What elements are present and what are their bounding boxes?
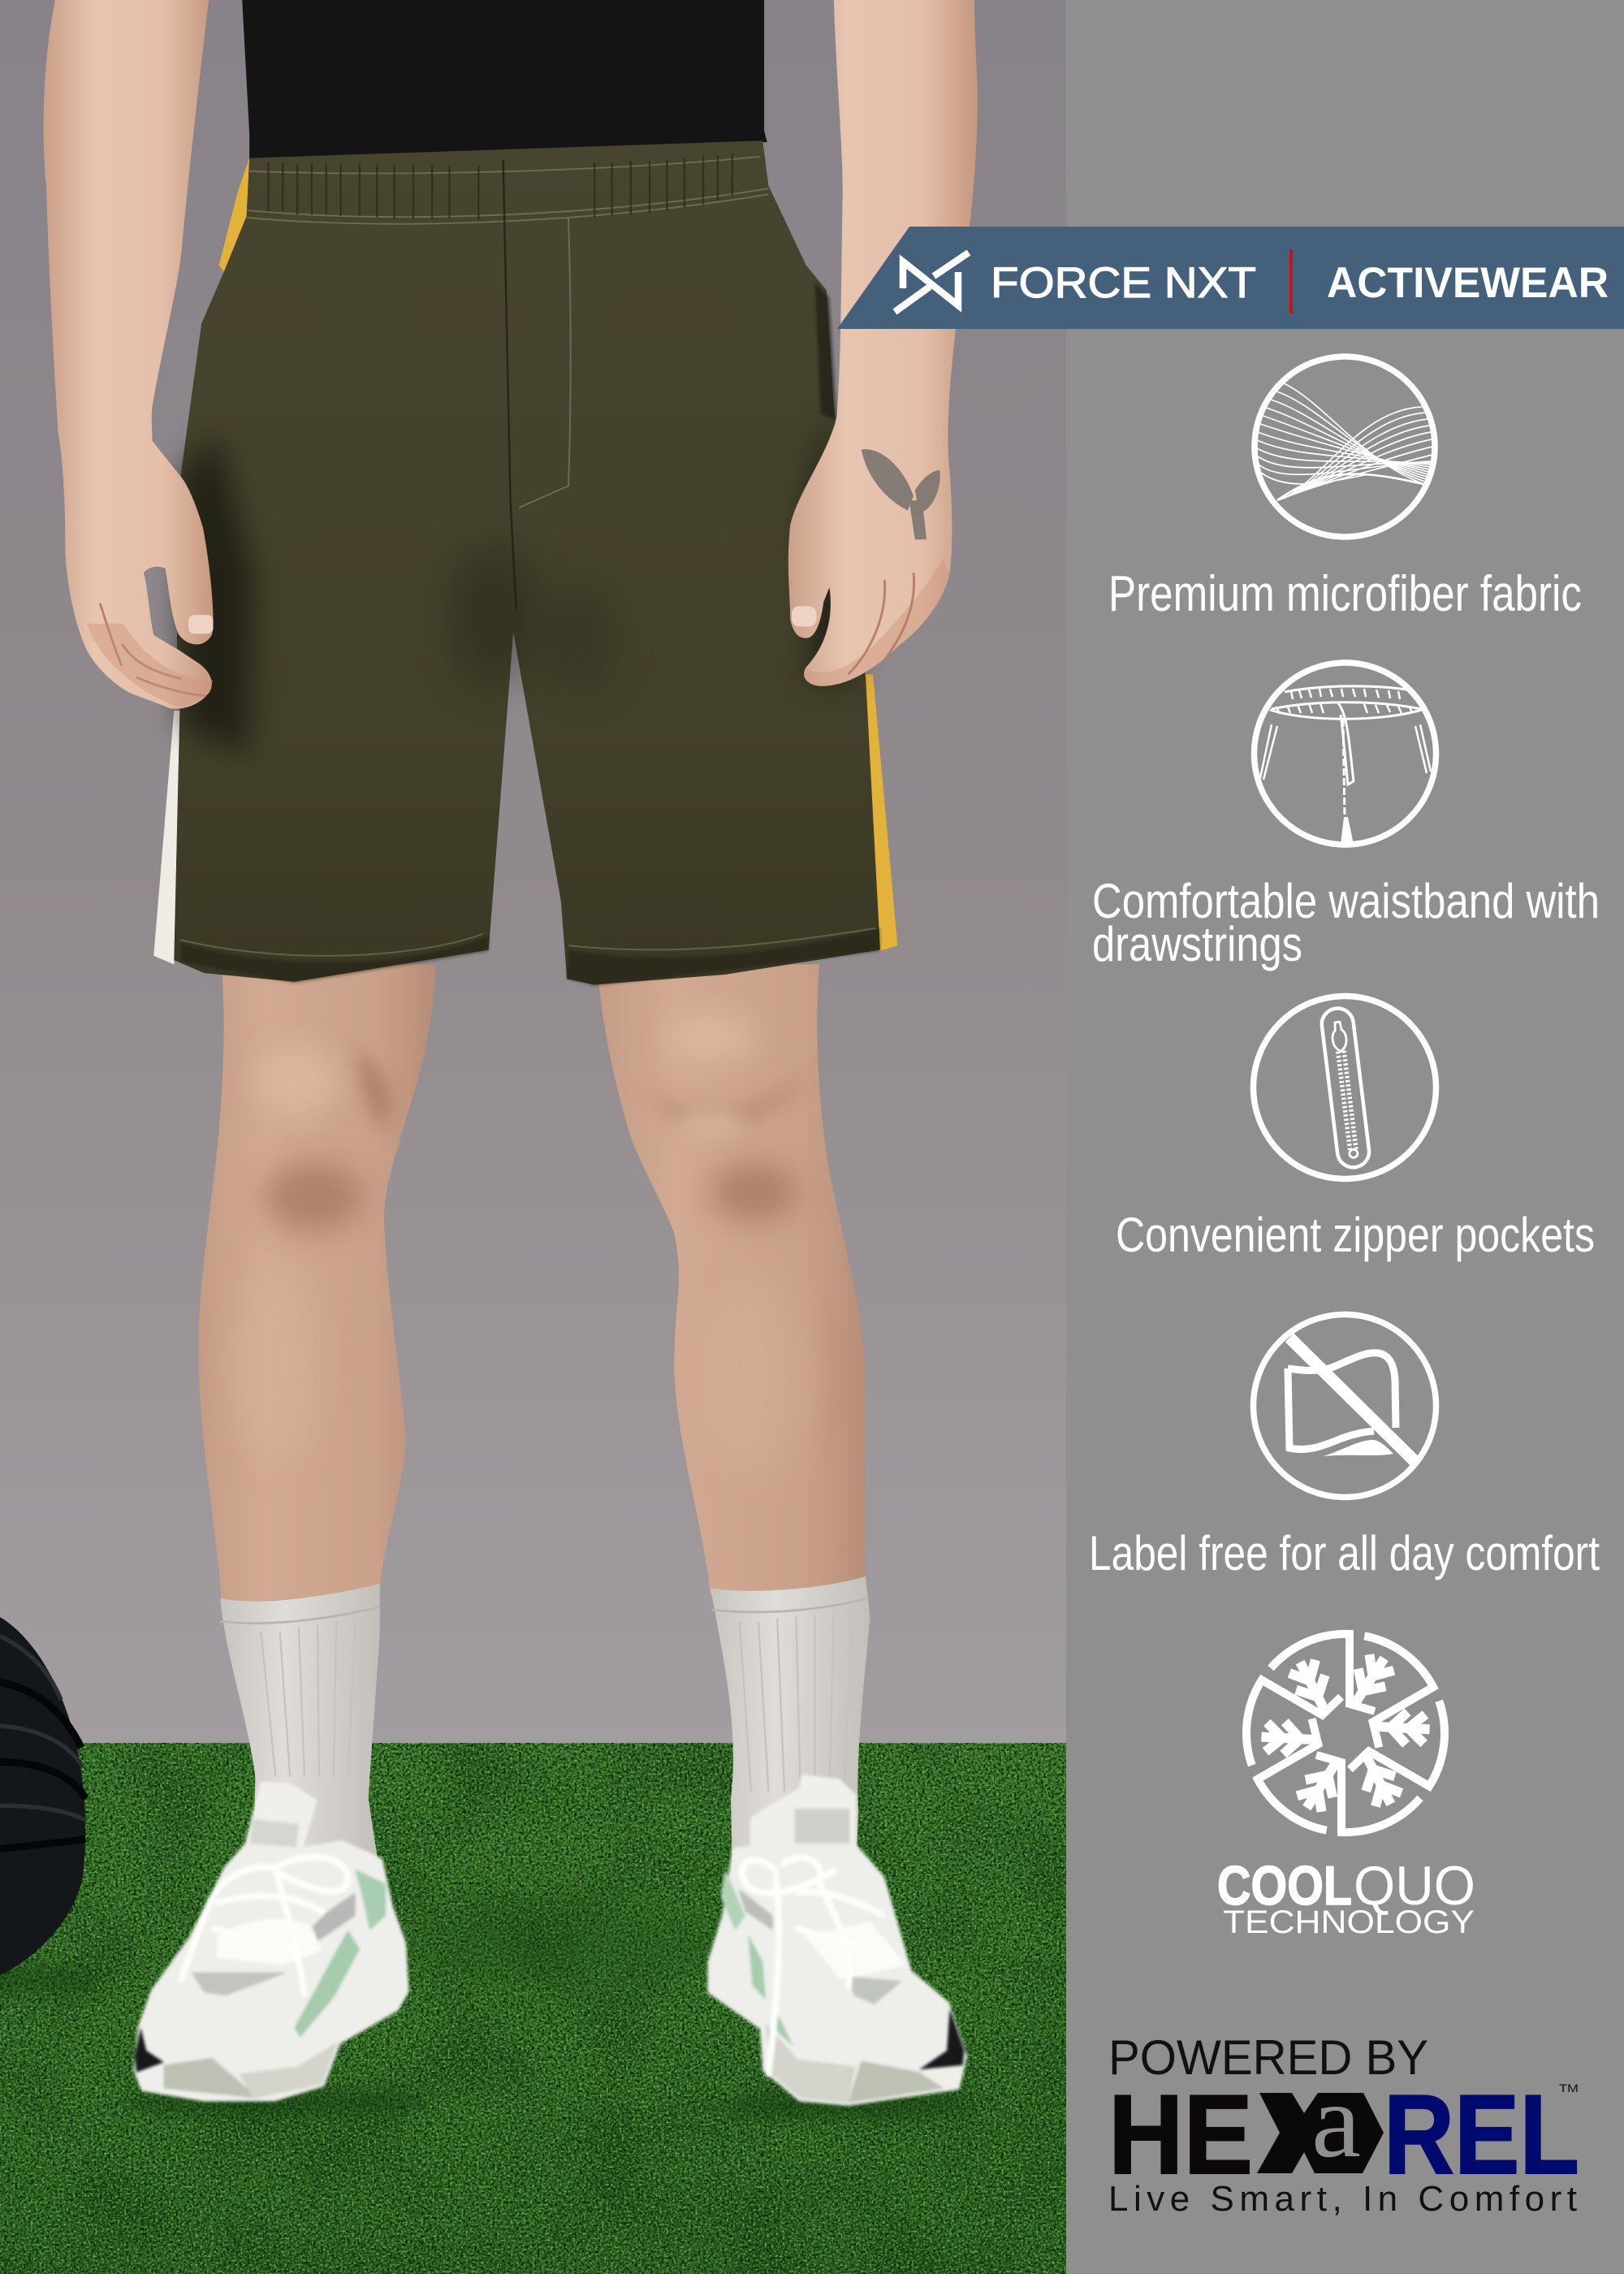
artificial turf floor	[0, 1743, 1073, 2274]
hex letters: HE	[1108, 2072, 1253, 2198]
coolquo wordmark	[1217, 1855, 1475, 1940]
icon: label free	[1254, 1314, 1436, 1498]
rel letters: REL	[1384, 2072, 1579, 2198]
black t-shirt	[242, 0, 767, 162]
icon: coolquo snowflake	[1222, 1619, 1469, 1848]
technology: TECHNOLOGY	[1223, 1904, 1475, 1940]
waistband gathers	[268, 153, 732, 220]
shorts	[153, 141, 897, 986]
right information panel	[1066, 0, 1624, 2274]
icon: zipper pocket	[1254, 996, 1436, 1179]
banner divider	[1289, 249, 1293, 313]
left leg	[188, 958, 443, 1610]
x and hexagon mark	[1257, 2093, 1384, 2173]
yellow side stripe at waist	[219, 158, 249, 273]
studio wall	[0, 0, 1073, 1746]
powered by hexarel logo	[1108, 2030, 1579, 2219]
icon: waistband with drawstrings	[1254, 663, 1436, 845]
cool: COOL	[1217, 1855, 1352, 1917]
icon: force nxt logo	[895, 253, 969, 312]
powered by: POWERED BY	[1108, 2030, 1428, 2085]
letter a: a	[1311, 2063, 1361, 2180]
right leg	[599, 965, 866, 1595]
banner category: ACTIVEWEAR	[1327, 259, 1609, 307]
waistband stitching	[179, 157, 876, 956]
back panel shade	[513, 609, 609, 984]
fly seam	[503, 159, 516, 609]
left sock	[220, 1584, 380, 1874]
thumbnail	[188, 615, 213, 633]
right sock	[710, 1576, 870, 1871]
left arm and hand	[44, 0, 214, 709]
trademark: TM	[1559, 2082, 1579, 2095]
icon: microfiber fabric	[1255, 357, 1435, 537]
label: comfortable waistband	[1092, 874, 1600, 971]
brand banner	[837, 227, 1624, 329]
product photo	[0, 0, 1073, 2274]
yellow side stripe	[864, 674, 897, 951]
fabric shading	[181, 283, 880, 986]
label line two: drawstrings	[1092, 917, 1302, 971]
tagline: Live Smart, In Comfort	[1108, 2179, 1577, 2219]
brand name: FORCE NXT	[991, 259, 1256, 307]
right arm and hand	[788, 0, 978, 686]
right shoe	[710, 1777, 965, 2103]
quo: QUO	[1354, 1855, 1475, 1917]
tattoo: bird	[862, 449, 940, 539]
tyre	[0, 1617, 85, 1975]
white side stripe	[153, 711, 179, 965]
thumbnail	[792, 606, 816, 626]
shorts body	[174, 141, 880, 985]
left shoe	[135, 1783, 406, 2099]
